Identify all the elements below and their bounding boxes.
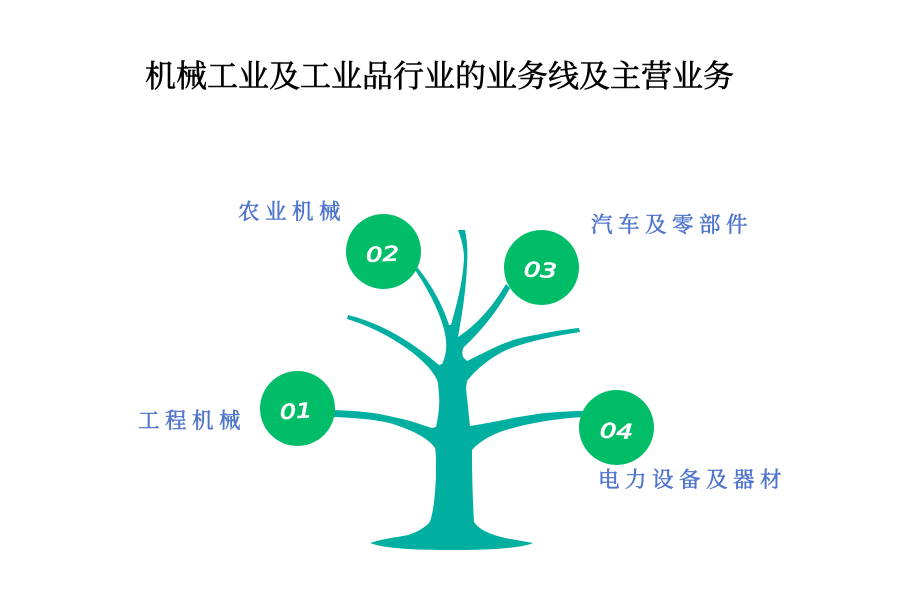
label 03: 汽车及零部件 bbox=[591, 213, 753, 237]
title: 机械工业及工业品行业的业务线及主营业务 bbox=[145, 59, 734, 94]
label 04: 电力设备及器材 bbox=[598, 468, 787, 492]
circle 03 bbox=[504, 230, 579, 305]
label 02: 农业机械 bbox=[238, 200, 346, 224]
circle 02 bbox=[346, 214, 421, 289]
label 01: 工程机械 bbox=[138, 409, 246, 433]
circle 02: 02 bbox=[365, 241, 400, 267]
circle 03: 03 bbox=[523, 257, 558, 283]
circle 04: 04 bbox=[600, 418, 633, 444]
circle 04 bbox=[579, 390, 654, 465]
tree bbox=[333, 230, 583, 550]
circle 01 bbox=[260, 371, 335, 446]
circle 01: 01 bbox=[279, 398, 313, 424]
